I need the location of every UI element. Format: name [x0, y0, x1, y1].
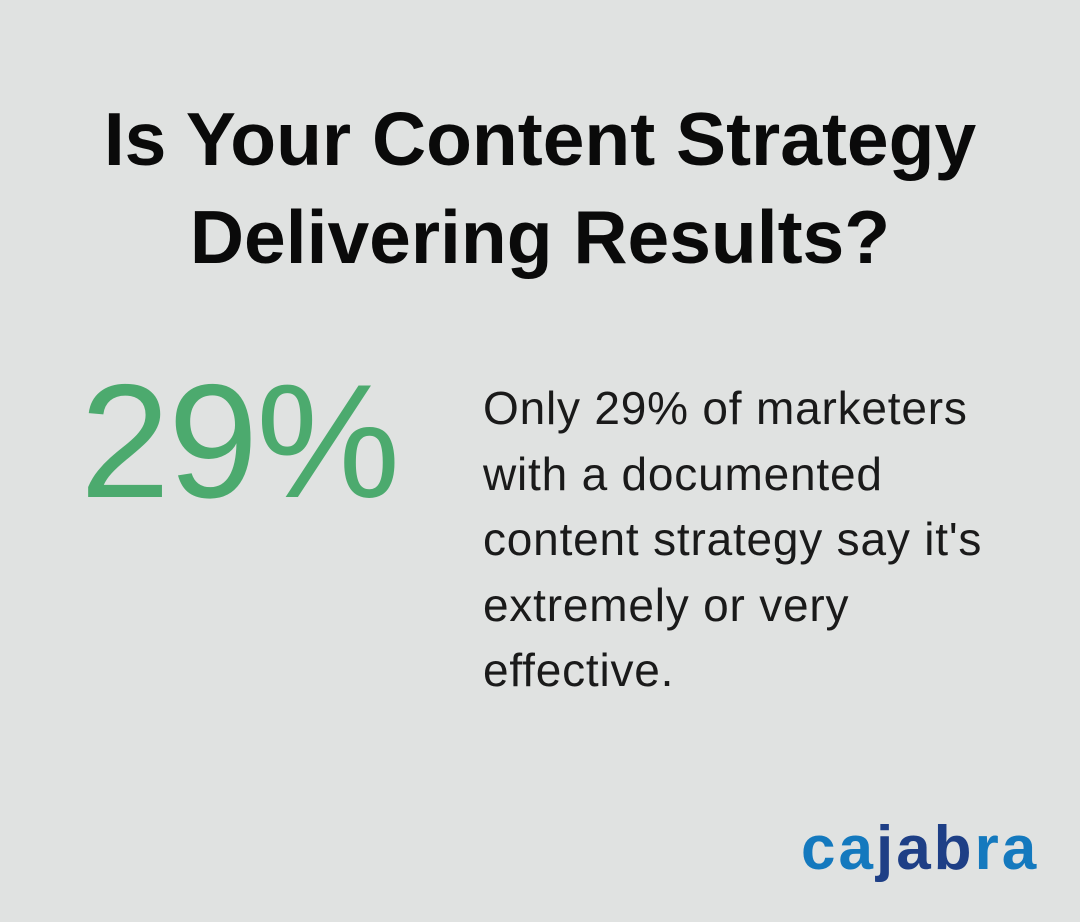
stat description [483, 382, 982, 696]
stat description: Only 29% of marketers [483, 382, 968, 434]
stat description: extremely or very [483, 578, 849, 630]
stat description: effective. [483, 644, 674, 696]
stat description: with a documented [483, 448, 883, 500]
title [104, 97, 976, 279]
logo: cajabra: cajabra [801, 814, 1039, 883]
stat description: content strategy say it's [483, 513, 982, 565]
title: Is Your Content Strategy [104, 97, 976, 181]
big stat: 29%: 29% [80, 351, 398, 532]
title: Delivering Results? [190, 195, 890, 279]
